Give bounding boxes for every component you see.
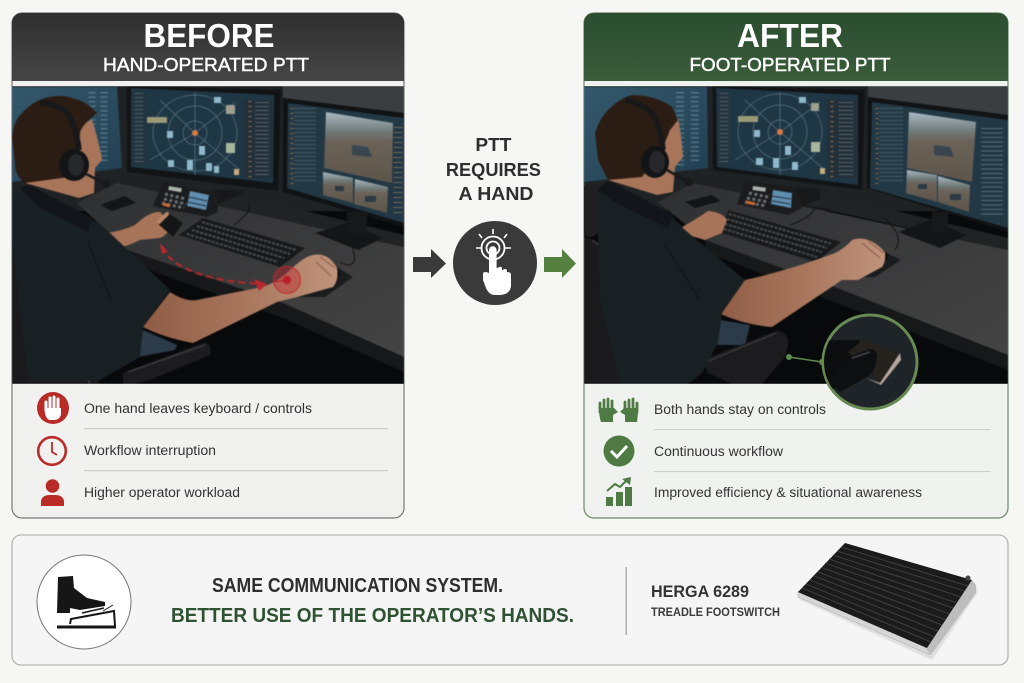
- after subheading: FOOT-OPERATED PTT: [690, 55, 891, 75]
- after list row: check icon: [604, 436, 634, 466]
- monitor stand: [798, 188, 820, 208]
- left hand on keyboard: [682, 211, 727, 240]
- monitor right: [283, 98, 404, 227]
- before list row: clock icon: [38, 437, 66, 465]
- panel: bottom summary: [12, 535, 1008, 665]
- small desk device: [100, 196, 136, 211]
- chair: [12, 245, 100, 384]
- centre caption: REQUIRES: [446, 159, 541, 180]
- before list row: person icon: [41, 479, 64, 506]
- monitor left: [584, 87, 708, 182]
- shirt: [12, 210, 170, 380]
- right arm on mouse: [718, 238, 885, 327]
- after list text 1: Both hands stay on controls: [654, 402, 826, 417]
- headset: [40, 102, 79, 150]
- arrow: green: [544, 249, 576, 278]
- monitor centre: [127, 86, 281, 191]
- panel: after: [576, 13, 1008, 518]
- jeans: [138, 330, 177, 357]
- after header bar: [584, 13, 1008, 81]
- callout: foot on pedal inset: [786, 315, 917, 409]
- red motion arrow: [161, 247, 262, 284]
- arrow: dark: [413, 249, 446, 278]
- photo: operator using hand PTT: [12, 86, 404, 384]
- icon: boot on treadle: [37, 555, 131, 649]
- product: footswitch: [798, 543, 978, 660]
- PTT hand and forearm: [107, 212, 170, 247]
- before list row: hand icon: [37, 392, 69, 424]
- before list text 2: Workflow interruption: [84, 443, 216, 458]
- after list row: two hands icon: [599, 399, 638, 422]
- small desk device: [685, 195, 721, 208]
- mouse pad and mouse: [298, 267, 353, 298]
- summary line 1: SAME COMMUNICATION SYSTEM.: [212, 574, 503, 597]
- monitor right video feeds: [907, 112, 976, 182]
- centre caption: A HAND: [458, 183, 534, 204]
- headset: [625, 100, 663, 150]
- after list row: growth chart icon: [606, 477, 632, 506]
- before header bar: [12, 13, 404, 81]
- red target on wrist: [274, 266, 300, 294]
- after list text 3: Improved efficiency & situational awareness: [654, 485, 922, 500]
- desk console: [153, 192, 218, 217]
- keyboard: [179, 218, 305, 267]
- desk: [658, 183, 1008, 355]
- keyboard: [722, 210, 841, 262]
- mouse pad and mouse: [864, 253, 901, 278]
- neck and face: [25, 120, 102, 198]
- neck and face: [608, 118, 683, 195]
- jeans: [716, 320, 750, 345]
- icon: finger pressing button: [453, 221, 537, 305]
- monitor stand: [214, 190, 242, 203]
- panel: before: [12, 13, 404, 518]
- photo: operator with both hands on controls: [576, 86, 1008, 384]
- centre caption: PTT: [475, 134, 512, 155]
- monitor right video feeds: [324, 112, 393, 183]
- desk console: [737, 193, 802, 215]
- right arm on mouse: [143, 255, 338, 343]
- hair: [595, 95, 678, 180]
- before subheading: HAND-OPERATED PTT: [103, 55, 309, 75]
- desk: [77, 183, 404, 357]
- chair armrest: [702, 330, 788, 384]
- product descriptor: TREADLE FOOTSWITCH: [651, 605, 780, 619]
- shirt: [598, 210, 744, 384]
- monitor right: [867, 97, 1008, 232]
- product name: HERGA 6289: [651, 582, 749, 601]
- before heading: BEFORE: [144, 17, 274, 54]
- after heading: AFTER: [737, 17, 843, 54]
- hair: [12, 96, 97, 183]
- before list text 1: One hand leaves keyboard / controls: [84, 401, 312, 416]
- before list text 3: Higher operator workload: [84, 485, 240, 500]
- monitor centre: [713, 86, 865, 190]
- chair: [584, 237, 620, 384]
- centre callout: [413, 134, 576, 305]
- monitor left: [12, 87, 122, 182]
- after list text 2: Continuous workflow: [654, 444, 783, 459]
- summary line 2: BETTER USE OF THE OPERATOR’S HANDS.: [171, 604, 574, 627]
